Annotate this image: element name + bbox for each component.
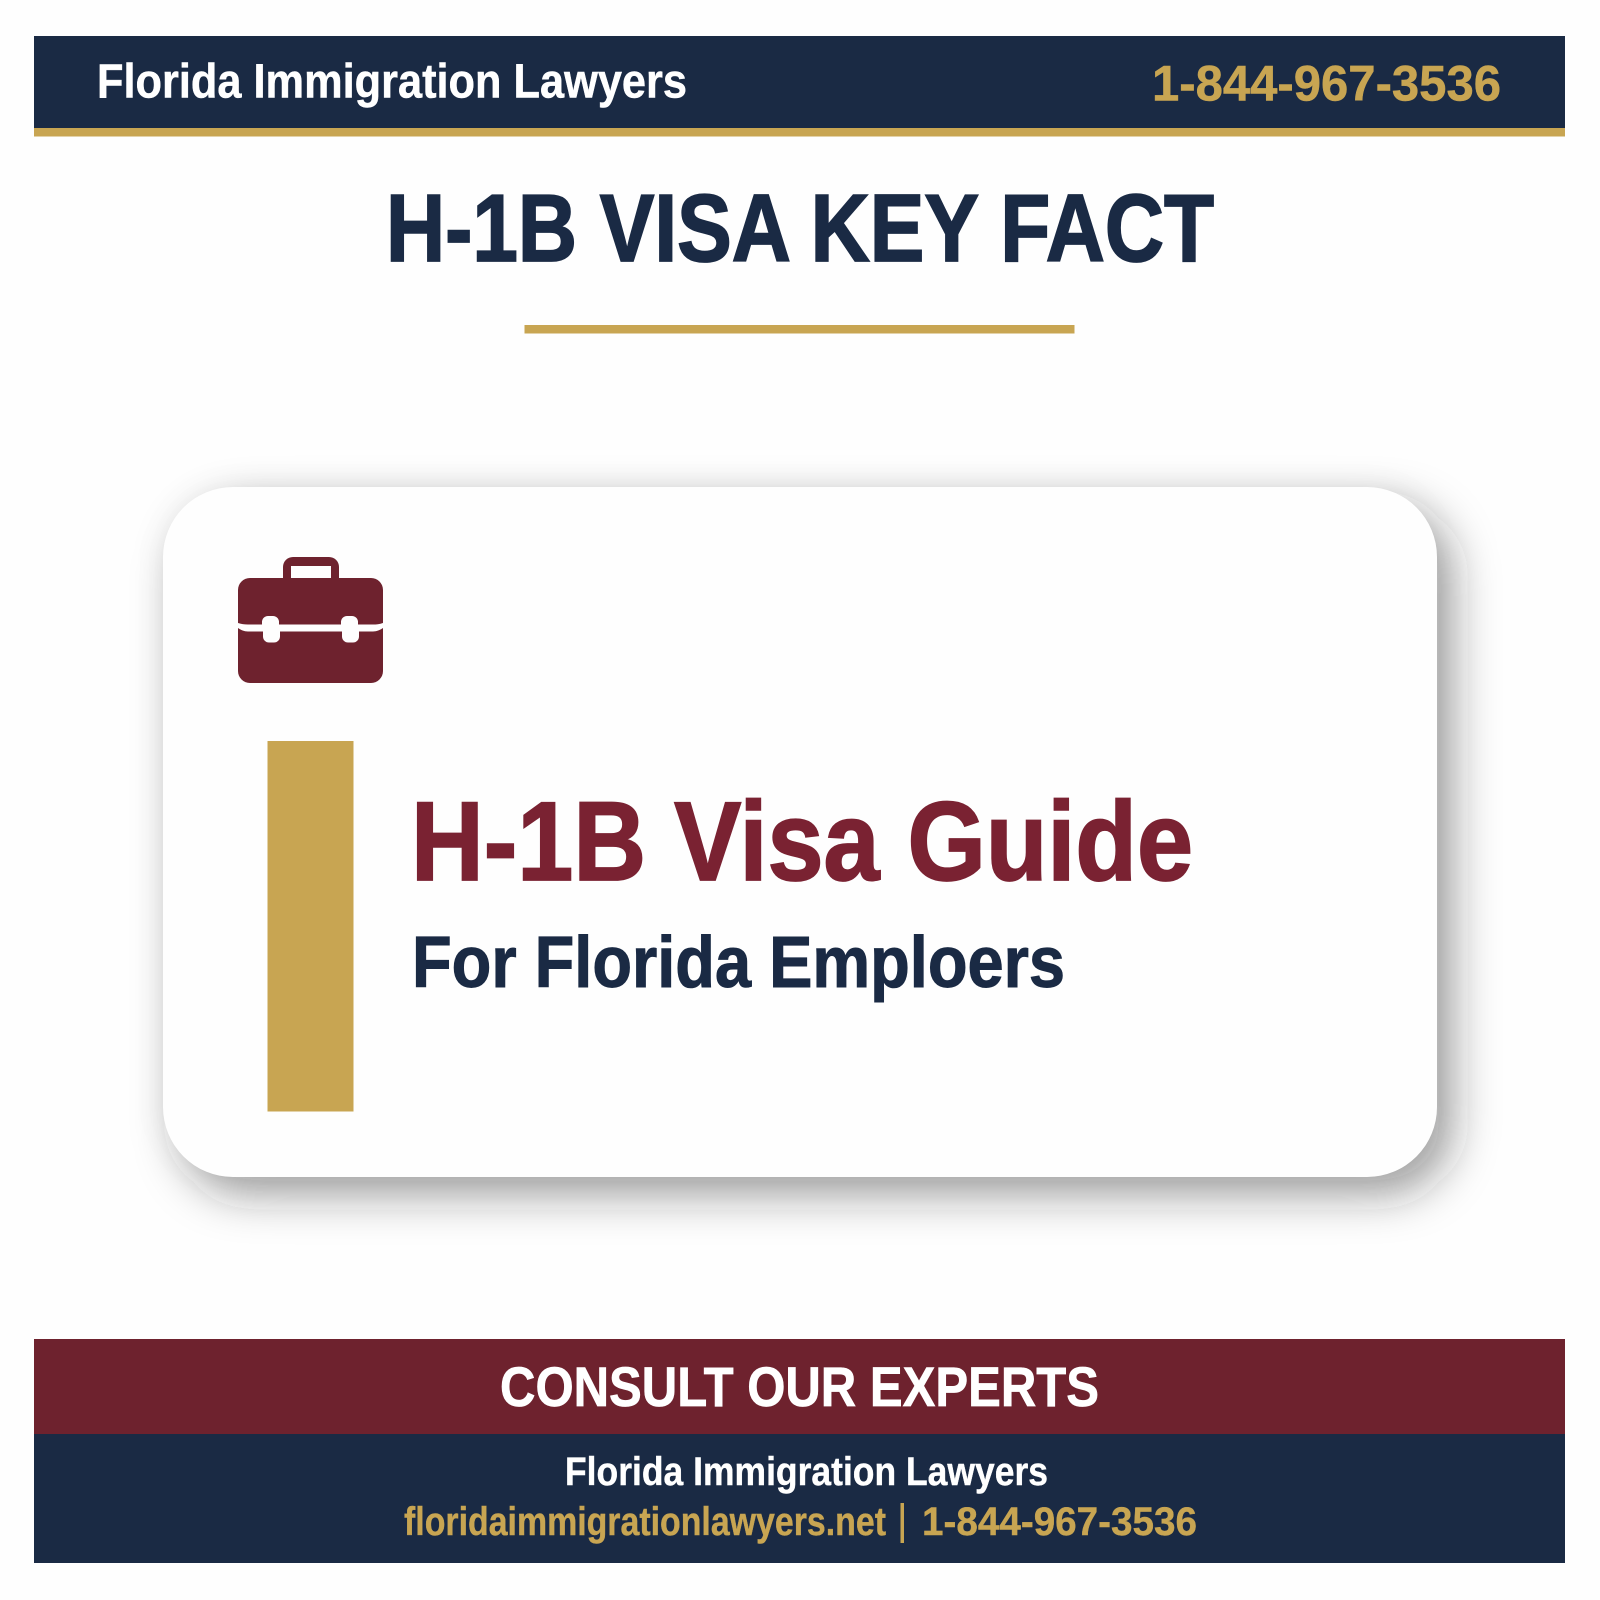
footer separator xyxy=(900,1503,904,1543)
footer contact band xyxy=(34,1434,1565,1563)
gold accent bar xyxy=(268,741,354,1112)
footer phone number: 1-844-967-3536 xyxy=(922,1500,1197,1544)
header bar xyxy=(34,36,1565,136)
title underline xyxy=(524,325,1074,334)
title: H-1B VISA KEY FACT xyxy=(386,175,1214,282)
card surface xyxy=(163,487,1437,1177)
footer firm name: Florida Immigration Lawyers xyxy=(565,1450,1048,1494)
panel: main card xyxy=(163,487,1453,1195)
card shadow xyxy=(163,487,1453,1195)
call to action text: CONSULT OUR EXPERTS xyxy=(500,1355,1099,1418)
footer call to action band xyxy=(34,1339,1565,1434)
firm name: Florida Immigration Lawyers xyxy=(97,56,687,108)
card subheading: For Florida Emploers xyxy=(412,923,1065,1003)
header phone number: 1-844-967-3536 xyxy=(1152,56,1501,112)
icon: briefcase xyxy=(238,557,383,683)
card heading: H-1B Visa Guide xyxy=(411,779,1193,904)
footer website: floridaimmigrationlawyers.net xyxy=(404,1500,886,1544)
